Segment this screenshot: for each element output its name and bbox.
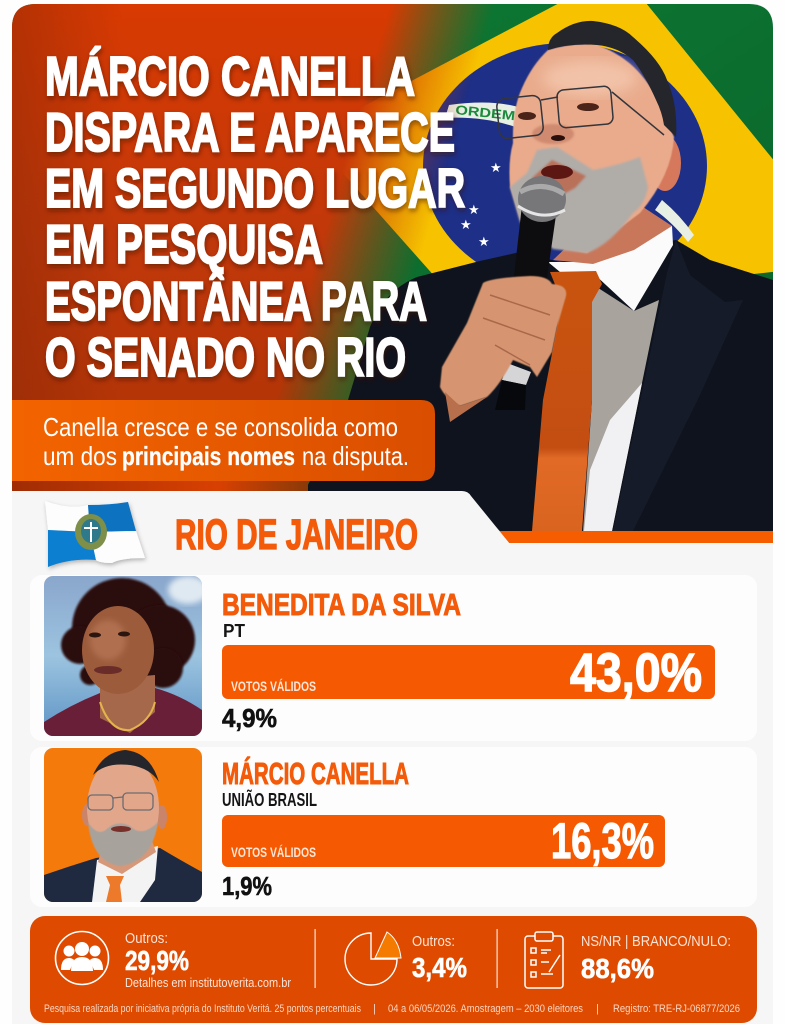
suit: [305, 240, 773, 531]
result bar: VOTOS VÁLIDOS: [231, 678, 316, 694]
hero photo panel: [12, 0, 785, 531]
icon: pie chart: [345, 932, 401, 985]
secondary value: 4,9%: [222, 703, 277, 733]
candidate name: MÁRCIO CANELLA: [222, 756, 409, 791]
orange gradient overlay: [12, 4, 490, 485]
stat: outros 29,9%: [125, 930, 292, 990]
brazilian flag background: ★: [468, 202, 480, 217]
stat: outros 3,4%: Outros:: [412, 933, 455, 950]
brazilian flag background: [12, 0, 785, 531]
headline: ESPONTÂNEA PARA: [45, 270, 427, 332]
brazilian flag background: ★: [490, 160, 502, 175]
beard: [510, 147, 648, 253]
result bar: 16,3%: [551, 813, 654, 869]
icon: people: [56, 932, 108, 984]
eyes: [518, 112, 536, 120]
neck: [553, 205, 672, 264]
shirt: [583, 284, 659, 531]
candidate card: Benedita da Silva: [44, 576, 715, 736]
subtitle pill: [12, 400, 435, 481]
microphone: [513, 176, 566, 285]
methodology note: 04 a 06/05/2026. Amostragem – 2030 eleitores: [388, 1003, 583, 1015]
stat: ns/nr: NS/NR | BRANCO/NULO:: [581, 933, 731, 950]
tie: [532, 271, 602, 531]
orange accent strip: [495, 531, 773, 543]
stat: outros 29,9%: Outros:: [125, 930, 168, 947]
result bar: 43,0%: [570, 643, 702, 703]
photo: Benedita: [44, 576, 208, 736]
stat: outros 29,9%: Detalhes em institutoverita.com.br: [125, 975, 292, 990]
methodology note: |: [373, 1003, 376, 1015]
result bar: [222, 813, 665, 869]
footer stats panel: [30, 916, 757, 1023]
headline: MÁRCIO CANELLA: [45, 45, 415, 107]
collar: [548, 226, 673, 311]
hair: [548, 21, 676, 137]
hand: [440, 276, 566, 406]
brazilian flag background: ★: [460, 217, 472, 232]
headline: DISPARA E APARECE: [45, 101, 455, 163]
result bar: [222, 643, 715, 703]
stat: outros 29,9%: 29,9%: [125, 945, 189, 976]
right lapel: [613, 240, 743, 531]
glasses: [496, 86, 664, 139]
party: PT: [223, 621, 245, 641]
icon: Rio de Janeiro flag: [45, 501, 145, 567]
result bar: VOTOS VÁLIDOS: [231, 844, 316, 860]
nose: [532, 124, 574, 144]
strip under subtitle: [12, 481, 308, 491]
stat: outros 3,4%: [412, 933, 467, 983]
stat: outros 3,4%: 3,4%: [412, 952, 467, 983]
secondary value: 1,9%: [222, 871, 272, 901]
subtitle pill: um dos: [43, 441, 117, 471]
icon: clipboard: [525, 932, 563, 988]
methodology note: |: [596, 1003, 599, 1015]
candidate card: Márcio Canella: [44, 748, 665, 902]
subtitle pill: Canella cresce e se consolida como: [43, 412, 398, 442]
forehead highlight: [542, 60, 638, 96]
methodology note: [44, 1003, 740, 1015]
headline: [45, 45, 465, 388]
headline: EM SEGUNDO LUGAR: [45, 157, 465, 219]
methodology note: Pesquisa realizada por iniciativa própria do Instituto Veritá. 25 pontos percentuais: [44, 1003, 361, 1015]
photo: Márcio: [44, 748, 202, 902]
brazilian flag background: ORDEM: [455, 102, 516, 123]
brazilian flag background: ★: [478, 234, 490, 249]
ear: [657, 139, 681, 191]
mic base: [502, 363, 531, 385]
wrist: [445, 392, 487, 422]
mouth: [541, 165, 573, 179]
methodology note: Registro: TRE-RJ-06877/2026: [613, 1003, 740, 1015]
stat: ns/nr: [581, 933, 731, 984]
headline: EM PESQUISA: [45, 213, 323, 275]
upper lip area: [532, 160, 586, 196]
headline: O SENADO NO RIO: [45, 326, 406, 388]
face: [509, 44, 674, 253]
state title: RIO DE JANEIRO: [175, 511, 418, 559]
state header panel: [12, 491, 773, 1024]
subtitle pill: na disputa.: [302, 441, 409, 471]
candidate name: BENEDITA DA SILVA: [222, 587, 461, 622]
finger lines: [483, 295, 550, 365]
party: UNIÃO BRASIL: [222, 789, 317, 810]
speaker portrait: [305, 21, 773, 531]
subtitle pill: principais nomes: [122, 441, 295, 471]
stat: ns/nr: 88,6%: [581, 953, 654, 984]
